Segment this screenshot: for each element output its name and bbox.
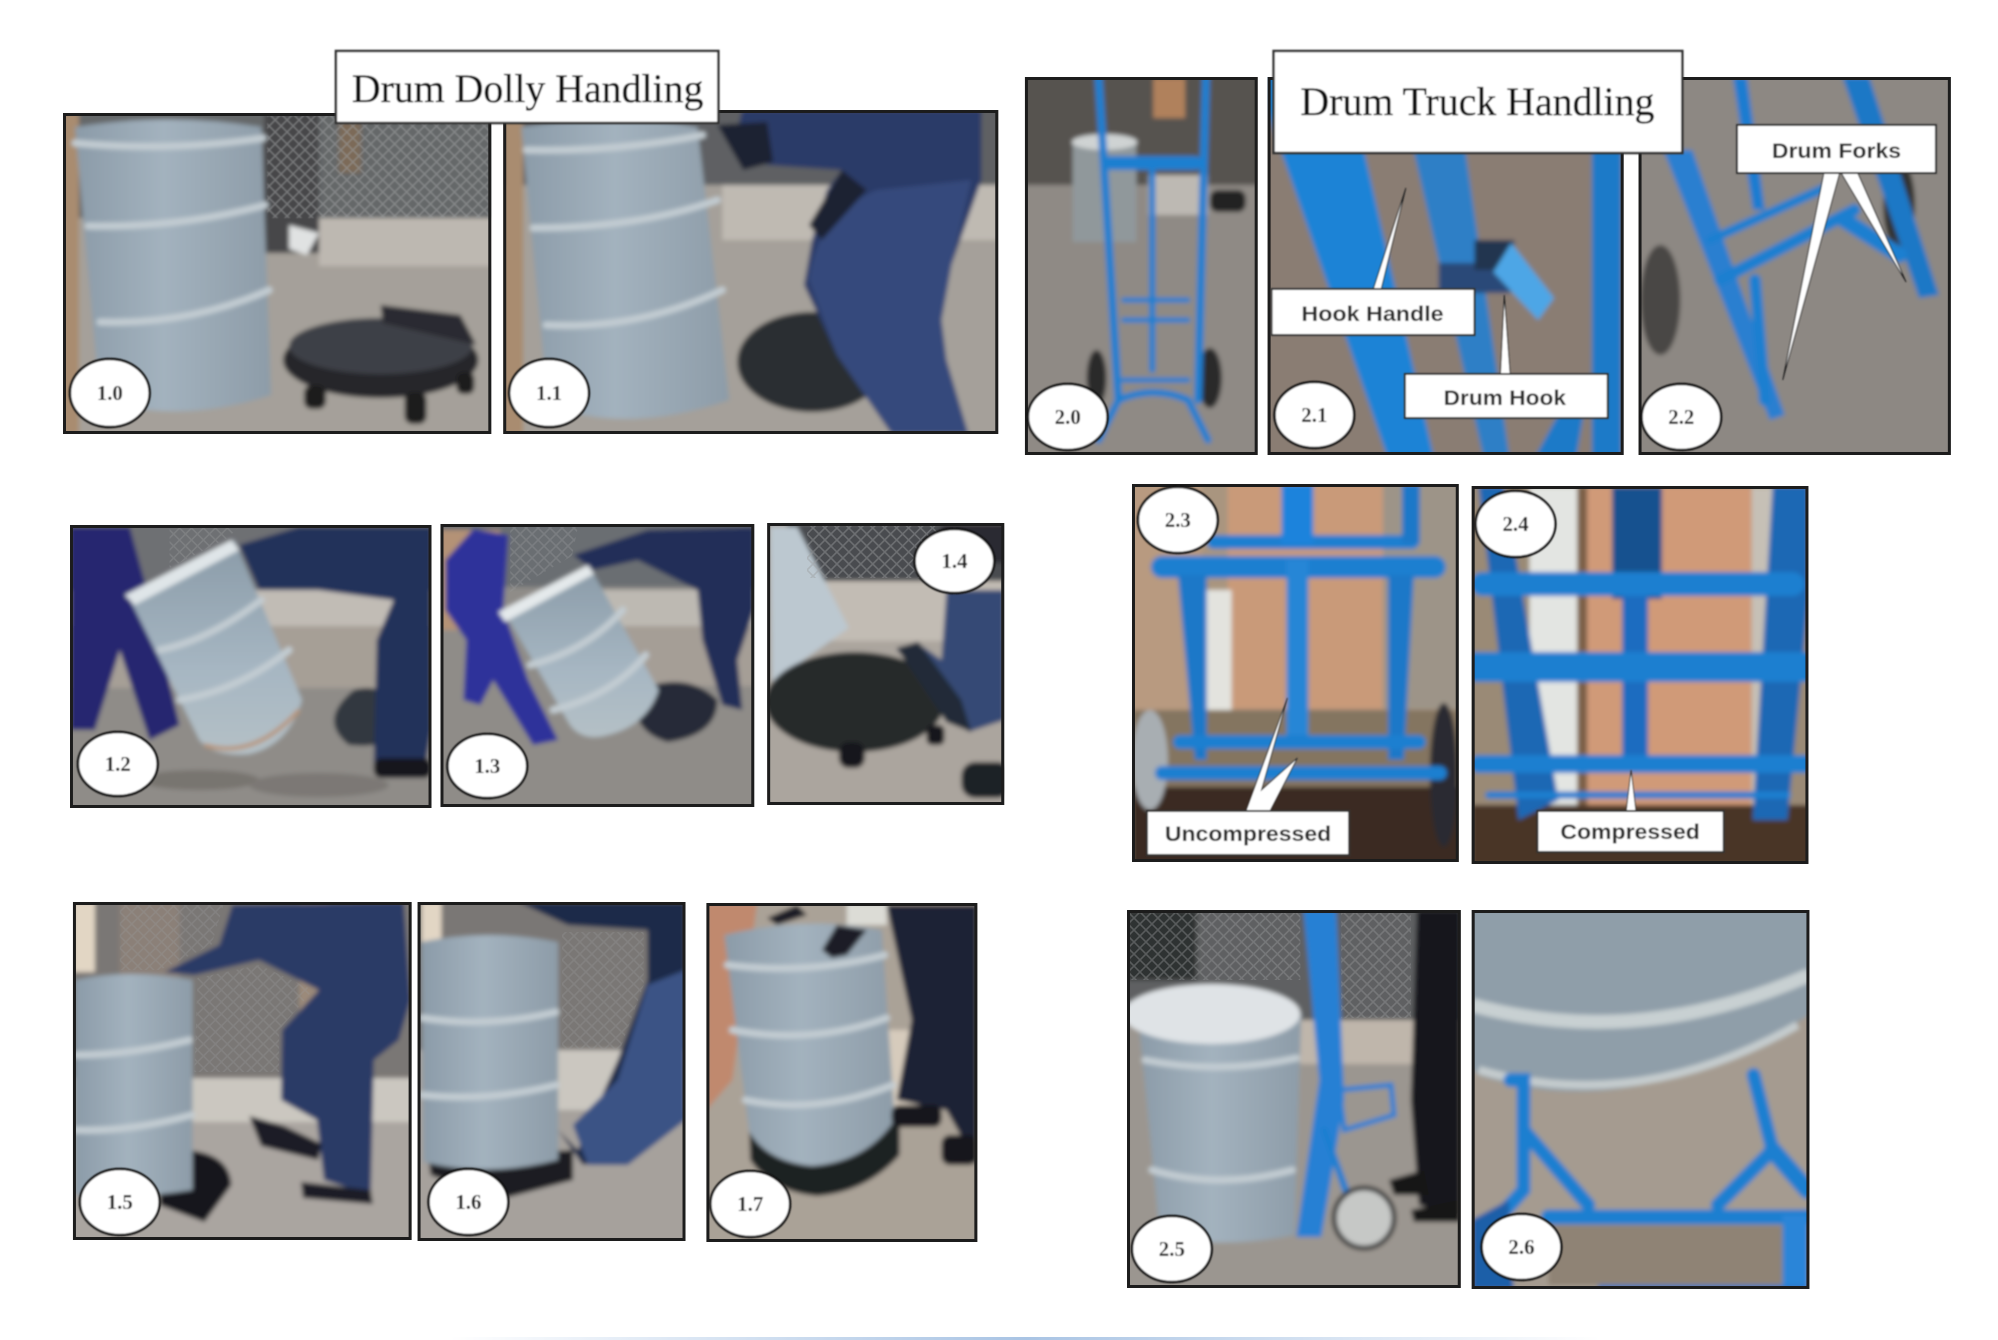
callout: compressed <box>1537 770 1724 852</box>
badge 1.1: 1.1 <box>536 381 562 405</box>
badge 1.5 <box>80 1169 160 1235</box>
photo 1.7: drum secured on dolly <box>688 880 996 1260</box>
badge 1.4 <box>915 529 994 593</box>
badge 2.2: 2.2 <box>1668 405 1694 429</box>
badge 1.3 <box>447 734 527 798</box>
badge 1.4: 1.4 <box>941 549 968 573</box>
callout: uncompressed <box>1147 698 1349 855</box>
badge 2.5: 2.5 <box>1159 1237 1185 1261</box>
badge 2.2 <box>1642 384 1721 450</box>
photo 1.4: drum above dolly with foot <box>747 505 1026 825</box>
badge 2.5 <box>1132 1216 1212 1282</box>
badge 1.1 <box>509 359 589 427</box>
photo 2.1: drum hook and hook handle <box>1248 55 1646 475</box>
photo 2.2: drum forks <box>1616 55 1974 475</box>
title: Drum Dolly Handling: Drum Dolly Handling <box>352 66 703 111</box>
photo 1.0: drum and dolly <box>40 90 518 450</box>
badge 2.0 <box>1028 384 1108 450</box>
callout: hook handle <box>1272 188 1474 335</box>
badge 1.7: 1.7 <box>737 1192 763 1216</box>
photo 2.5: truck beside drum <box>1105 890 1484 1310</box>
badge 1.5: 1.5 <box>107 1190 133 1214</box>
callout: drum hook: Drum Hook <box>1444 387 1566 410</box>
title: Drum Dolly Handling <box>336 51 718 123</box>
badge 2.1: 2.1 <box>1301 403 1327 427</box>
photo 2.6: drum resting on forks <box>1449 890 1832 1310</box>
badge 2.4: 2.4 <box>1502 512 1529 536</box>
photo 2.4: compressed latch <box>1449 465 1827 885</box>
callout: drum hook <box>1405 295 1608 418</box>
photo 2.3: uncompressed latch <box>1110 465 1479 885</box>
badge 2.1 <box>1275 382 1354 448</box>
badge 2.4 <box>1476 491 1555 557</box>
badge 2.0: 2.0 <box>1055 405 1081 429</box>
photo 2.0: full drum truck <box>1004 55 1278 475</box>
badge 2.6 <box>1482 1214 1561 1280</box>
badge 1.2: 1.2 <box>105 752 131 776</box>
photo 1.1: worker tilting drum <box>478 90 1016 450</box>
title: Drum Truck Handling: Drum Truck Handling <box>1300 79 1655 124</box>
callout: drum forks: Drum Forks <box>1772 140 1901 163</box>
badge 1.3: 1.3 <box>474 754 500 778</box>
callout: uncompressed: Uncompressed <box>1165 823 1331 846</box>
badge 2.3: 2.3 <box>1165 508 1191 532</box>
photo 1.2: two workers tipping drum <box>50 505 448 825</box>
badge 2.6: 2.6 <box>1508 1235 1535 1259</box>
badge 1.6: 1.6 <box>455 1190 481 1214</box>
title: Drum Truck Handling <box>1274 51 1682 153</box>
photo 1.3: drum lowered toward dolly <box>419 505 777 825</box>
badge 1.7 <box>710 1171 790 1237</box>
callout: compressed: Compressed <box>1560 821 1700 844</box>
callout: drum forks <box>1737 125 1936 380</box>
badge 2.3 <box>1138 487 1218 553</box>
photo 1.5: worker stepping on dolly <box>50 880 429 1260</box>
badge 1.0 <box>70 359 150 427</box>
callout: hook handle: Hook Handle <box>1301 303 1444 326</box>
photo 1.6: drum on dolly <box>399 880 707 1260</box>
badge 1.6 <box>429 1169 508 1235</box>
badge 1.0: 1.0 <box>97 381 123 405</box>
badge 1.2 <box>78 732 158 796</box>
